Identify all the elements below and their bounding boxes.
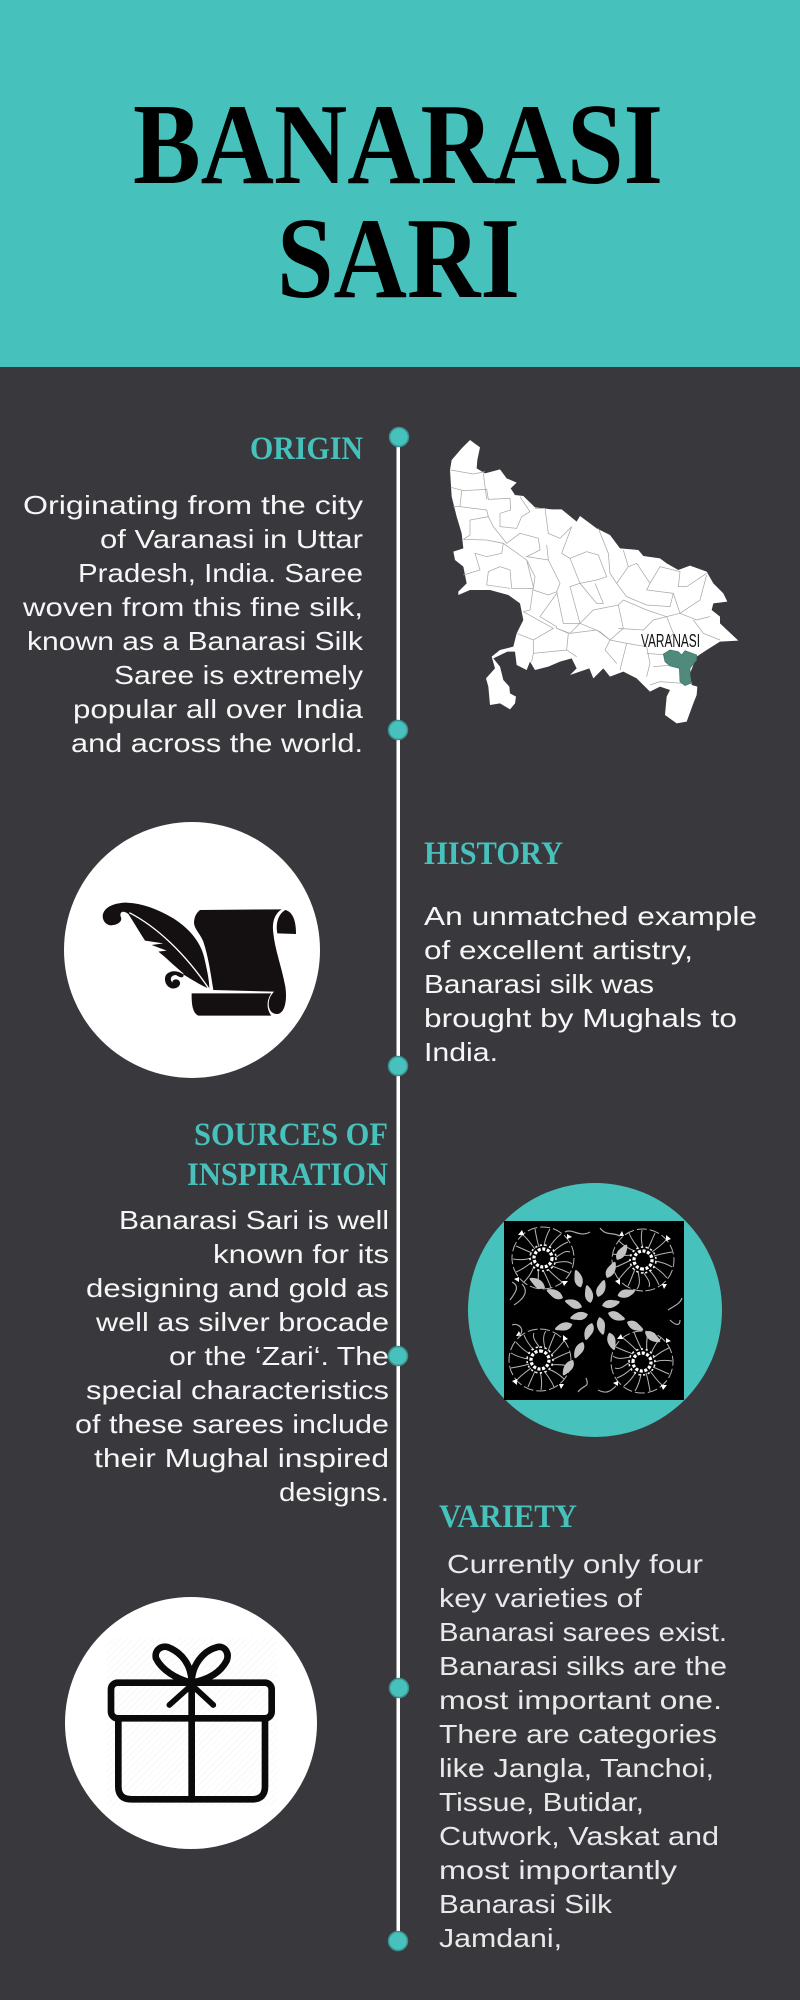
text block: sources of inspiration: their Mughal inspired [94, 1443, 389, 1473]
Varanasi region highlight [663, 650, 697, 686]
text block: history: Banarasi silk was [424, 969, 654, 999]
heading: sources of inspiration: INSPIRATION [187, 1157, 388, 1193]
text block: history: of excellent artistry, [424, 935, 693, 965]
heading: variety: VARIETY [439, 1499, 577, 1535]
map of Uttar Pradesh with Varanasi [450, 440, 738, 723]
text block: history: brought by Mughals to [424, 1003, 737, 1033]
header band [0, 0, 800, 367]
text block: sources of inspiration: of these sarees include [75, 1409, 389, 1439]
panel: origin [22, 431, 364, 758]
corner vines [510, 1228, 682, 1392]
text block: variety: most importantly [439, 1855, 677, 1885]
text block: origin: popular all over India [73, 694, 364, 724]
text block: origin: woven from this fine silk, [22, 592, 363, 622]
icon: brocade pattern [468, 1183, 722, 1437]
text block: sources of inspiration: known for its [213, 1239, 389, 1269]
text block: history [424, 901, 757, 1067]
title: BANARASI [133, 81, 663, 209]
text block: origin: Pradesh, India. Saree [78, 558, 363, 588]
heading: origin: ORIGIN [250, 431, 363, 467]
timeline dot 5 [390, 1678, 408, 1698]
heading: sources of inspiration [187, 1117, 388, 1193]
timeline dot 4 [388, 1346, 408, 1366]
text block: variety: Tissue, Butidar, [439, 1787, 644, 1817]
text block: sources of inspiration: special characteristics [86, 1375, 389, 1405]
timeline dot 2 [388, 720, 408, 740]
text block: sources of inspiration: designs. [279, 1477, 389, 1507]
text block: variety: There are categories [439, 1719, 717, 1749]
scroll top roll [277, 910, 296, 934]
icon: quill and scroll [64, 822, 320, 1078]
gift ribbon tails [169, 1685, 213, 1705]
heading: history: HISTORY [424, 836, 563, 872]
map label: Varanasi: VARANASI [641, 631, 700, 651]
text block: variety: Currently only four [447, 1549, 703, 1579]
gift bow [156, 1647, 228, 1683]
text block: history: An unmatched example [424, 901, 757, 931]
timeline dot 6 [388, 1932, 408, 1950]
timeline dot 3 [388, 1056, 408, 1076]
panel: history [424, 836, 757, 1067]
text block: variety: Banarasi silks are the [439, 1651, 727, 1681]
gift body [118, 1718, 265, 1799]
text block: variety: Cutwork, Vaskat and [439, 1821, 719, 1851]
title: SARI [277, 195, 520, 323]
central paisley swirl [527, 1242, 663, 1378]
text block: sources of inspiration: or the ‘Zari‘. The [169, 1341, 389, 1371]
feather [103, 903, 209, 989]
text block: variety: like Jangla, Tanchoi, [439, 1753, 714, 1783]
heading: sources of inspiration: SOURCES OF [194, 1117, 388, 1153]
text block: variety: key varieties of [439, 1583, 643, 1613]
text block: origin: known as a Banarasi Silk [27, 626, 364, 656]
panel: variety [439, 1499, 727, 1953]
text block: sources of inspiration: well as silver brocade [95, 1307, 389, 1337]
text block: variety: Banarasi Silk [439, 1889, 613, 1919]
text block: sources of inspiration: designing and gold as [86, 1273, 389, 1303]
text block: sources of inspiration [75, 1205, 389, 1507]
text block: origin [22, 490, 364, 758]
timeline [388, 428, 408, 1950]
scroll body [194, 909, 286, 1014]
feather spine [129, 913, 209, 989]
text block: history: India. [424, 1037, 498, 1067]
text block: origin: Saree is extremely [114, 660, 363, 690]
scroll bottom roll [192, 993, 271, 1016]
gift lid [111, 1683, 272, 1718]
panel: sources of inspiration [75, 1117, 389, 1507]
text block: sources of inspiration: Banarasi Sari is well [119, 1205, 389, 1235]
flower motifs [509, 1227, 674, 1393]
icon: gift box [65, 1597, 317, 1849]
text block: variety: most important one. [439, 1685, 722, 1715]
text block: variety [439, 1549, 727, 1953]
text block: variety: Jamdani, [439, 1923, 562, 1953]
text block: origin: and across the world. [71, 728, 363, 758]
gift ribbon [182, 1685, 202, 1799]
text block: variety: Banarasi sarees exist. [439, 1617, 727, 1647]
timeline dot 1 [390, 428, 408, 446]
text block: origin: of Varanasi in Uttar [100, 524, 363, 554]
text block: origin: Originating from the city [23, 490, 363, 520]
title [133, 81, 663, 323]
